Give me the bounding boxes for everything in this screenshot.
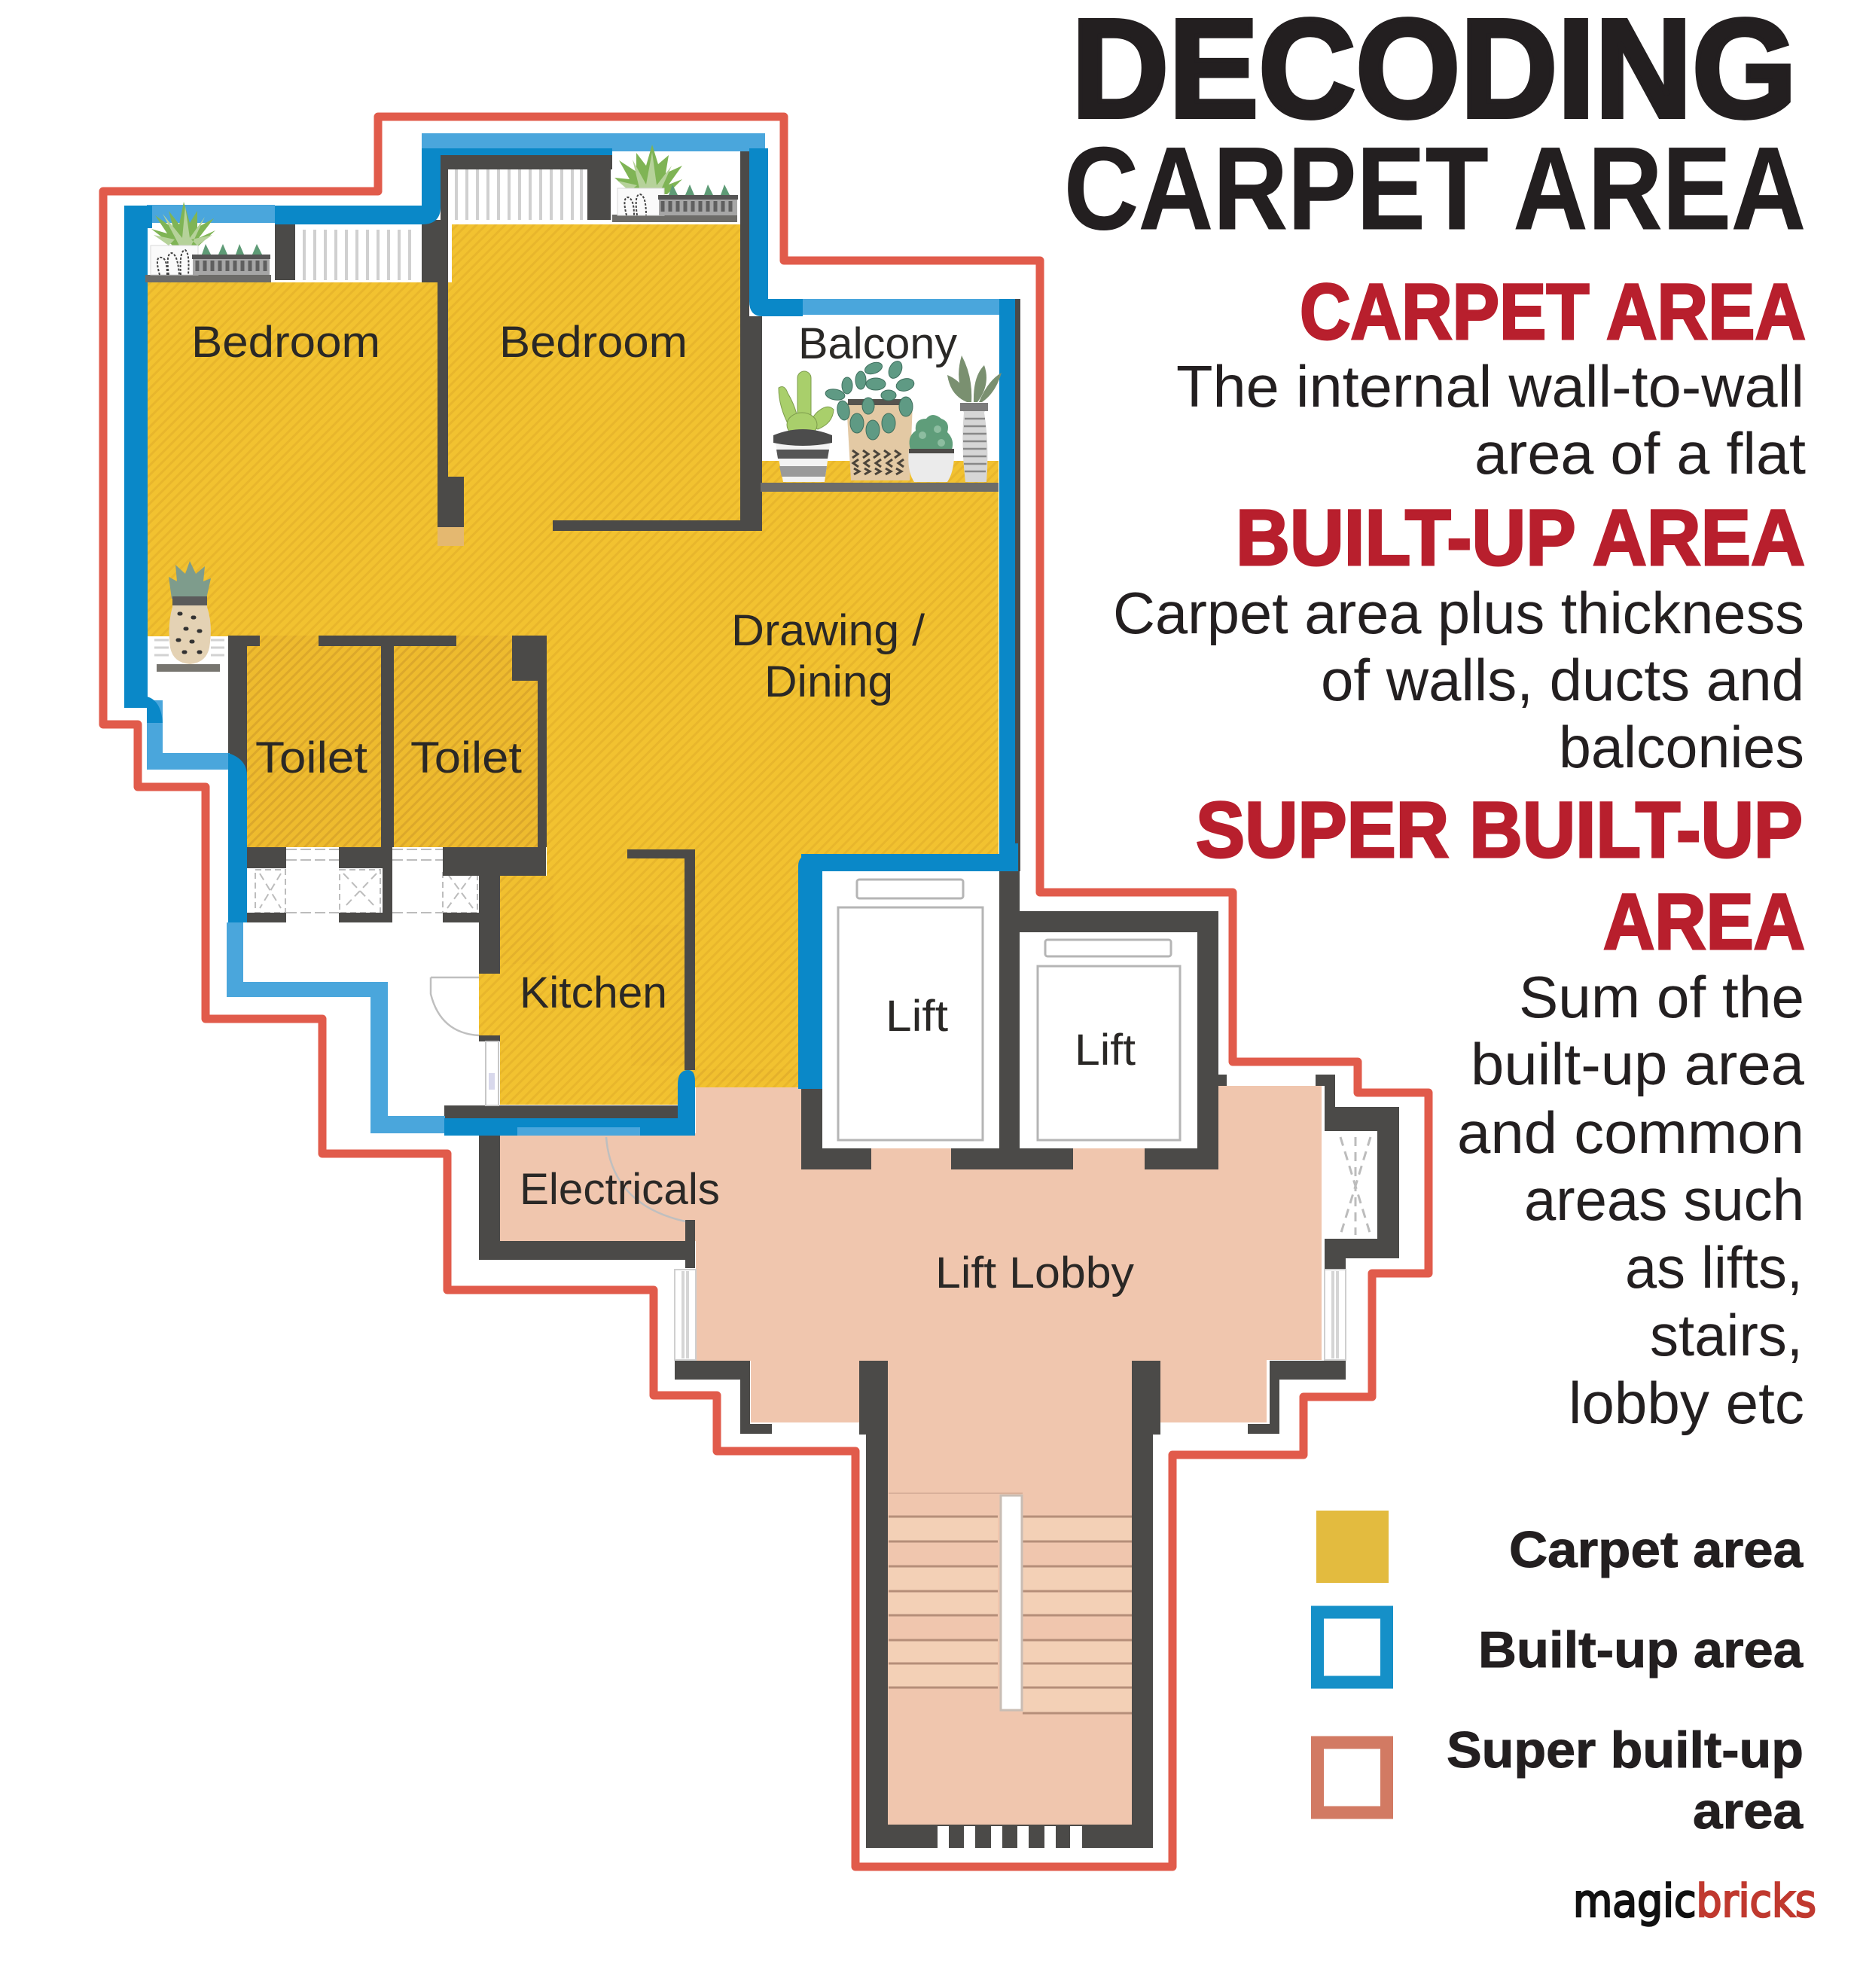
walls xyxy=(228,151,1399,1848)
plant: left bedroom balcony xyxy=(151,202,270,275)
section: super built-up area definition xyxy=(1196,786,1805,1436)
section: super built-up area definition: stairs, xyxy=(1650,1302,1803,1368)
kitchen side window xyxy=(486,1041,499,1105)
logo: magicbricks: magicbricks xyxy=(1573,1875,1816,1928)
room label: drawing / dining: Drawing / xyxy=(731,606,925,655)
section: carpet area definition: The internal wall-to-wall xyxy=(1176,353,1804,419)
stair flight xyxy=(889,1493,1132,1713)
room label: lift lobby: Lift Lobby xyxy=(935,1249,1134,1297)
legend label: super built-up area: area xyxy=(1693,1782,1804,1840)
room label: kitchen: Kitchen xyxy=(520,968,667,1017)
legend swatch: built-up area xyxy=(1318,1612,1387,1682)
section: built-up area definition: BUILT-UP AREA xyxy=(1236,494,1805,582)
lift shafts interior xyxy=(822,871,1197,1148)
section: super built-up area definition: SUPER BUILT-UP xyxy=(1196,786,1803,874)
section: super built-up area definition: lobby etc xyxy=(1569,1370,1804,1436)
section: super built-up area definition: Sum of the xyxy=(1519,964,1804,1030)
built-up area outline, dark blue sections xyxy=(124,148,1018,1136)
kitchen counter shading xyxy=(500,876,801,1081)
door swings xyxy=(431,977,685,1221)
plant: striped vase xyxy=(947,355,1002,482)
lobby side windows xyxy=(675,1270,1346,1360)
wall end stub at bedroom door xyxy=(438,527,464,546)
toilet shaft boxes xyxy=(255,849,477,913)
section: carpet area definition xyxy=(1176,268,1806,486)
room label: toilet right: Toilet xyxy=(410,733,522,782)
carpet area floor xyxy=(147,224,999,1105)
section: built-up area definition: of walls, ducts and xyxy=(1321,647,1804,713)
right duct dashes xyxy=(1340,1137,1371,1235)
section: built-up area definition: balconies xyxy=(1559,714,1804,780)
section: built-up area definition xyxy=(1113,494,1805,780)
plant: leafy plant in woven basket xyxy=(825,359,916,480)
legend label: super built-up area xyxy=(1447,1721,1804,1840)
plant: centre bedroom balcony xyxy=(614,145,738,215)
room label: lift left: Lift xyxy=(886,992,948,1041)
legend label: carpet area: Carpet area xyxy=(1509,1521,1804,1578)
balcony yellow band xyxy=(762,461,999,483)
lobby and stairs floor xyxy=(696,1086,1322,1825)
plant: spotted vase xyxy=(154,561,224,672)
electricals room floor xyxy=(500,1133,696,1241)
legend swatch: carpet area xyxy=(1316,1511,1389,1583)
section: super built-up area definition: and common xyxy=(1457,1099,1804,1166)
room label: drawing / dining xyxy=(731,606,925,706)
section: super built-up area definition: areas such xyxy=(1524,1166,1804,1233)
section: super built-up area definition: AREA xyxy=(1603,878,1805,966)
room label: drawing / dining: Dining xyxy=(764,657,893,706)
super built-up boundary outline xyxy=(103,117,1429,1867)
room label: electricals: Electricals xyxy=(520,1165,720,1214)
built-up area outline, light blue sections xyxy=(147,133,1000,1136)
legend label: built-up area: Built-up area xyxy=(1478,1621,1804,1679)
legend label: super built-up area: Super built-up xyxy=(1447,1721,1804,1779)
room label: toilet left: Toilet xyxy=(255,733,367,782)
section: carpet area definition: area of a flat xyxy=(1474,420,1806,486)
title xyxy=(1064,0,1806,255)
section: built-up area definition: Carpet area plus thickness xyxy=(1113,580,1804,646)
balcony window grilles xyxy=(297,169,587,280)
room label: bedroom right: Bedroom xyxy=(499,318,688,367)
toilet floors xyxy=(247,636,538,847)
room label: lift right: Lift xyxy=(1075,1026,1136,1075)
room label: balcony: Balcony xyxy=(798,319,957,368)
floor plan xyxy=(103,117,1429,1867)
lift car 2 xyxy=(1038,940,1180,1140)
section: super built-up area definition: as lifts, xyxy=(1625,1234,1803,1300)
plant: succulent in white bowl xyxy=(908,415,954,482)
room label: bedroom left: Bedroom xyxy=(191,318,380,367)
plant: cactus in striped pot xyxy=(773,371,834,482)
lift car 1 xyxy=(838,880,983,1140)
section: super built-up area definition: built-up area xyxy=(1471,1031,1805,1097)
stair wall window slots xyxy=(938,1826,1082,1848)
section: carpet area definition: CARPET AREA xyxy=(1300,268,1806,356)
legend xyxy=(1316,1511,1804,1840)
bedroom balcony shelves xyxy=(145,215,999,492)
legend swatch: super built-up area xyxy=(1318,1743,1387,1813)
